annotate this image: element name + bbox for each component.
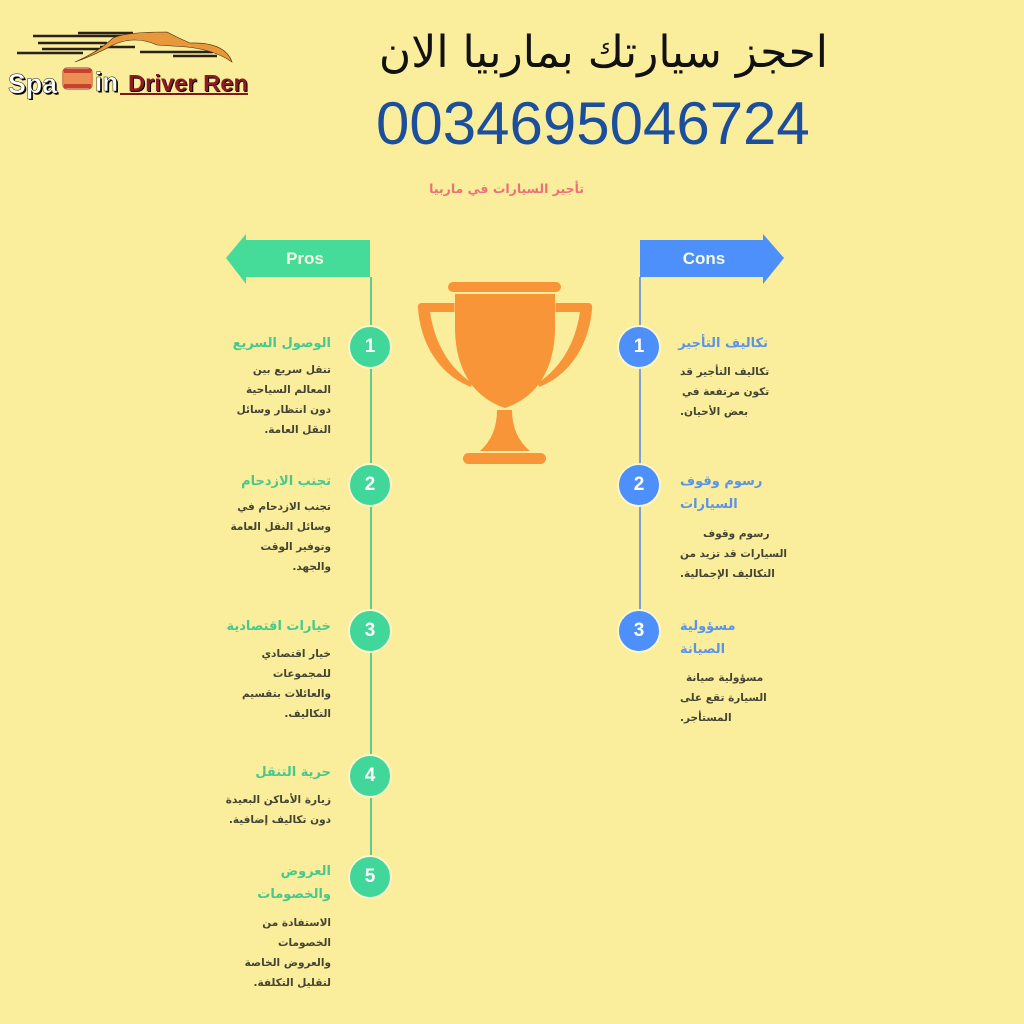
cons item 2: [680, 474, 787, 580]
logo wordmark: Spa: [8, 68, 57, 99]
pros item 1: [233, 336, 331, 436]
timeline line: cons: [639, 277, 640, 631]
subtitle: تأجير السيارات في ماربيا: [429, 181, 584, 196]
number badge 3: 3: [365, 620, 375, 641]
description: [226, 793, 331, 826]
heading: مسؤولية: [680, 619, 736, 634]
heading: تجنب الازدحام: [241, 474, 331, 489]
description: والعروض الخاصة: [245, 957, 331, 969]
description: وسائل النقل العامة: [231, 521, 331, 533]
description: والجهد.: [292, 561, 331, 573]
banner: Pros arrow: Pros: [286, 249, 324, 268]
logo wordmark: Spa: [10, 70, 59, 100]
heading: العروض: [281, 864, 331, 879]
logo wordmark: [8, 67, 249, 100]
description: [242, 648, 331, 720]
description: التكاليف.: [284, 708, 331, 720]
heading: حرية التنقل: [255, 765, 331, 780]
number badge 3: [617, 609, 661, 653]
number badge 2: [617, 463, 661, 507]
logo wordmark: in: [96, 68, 120, 98]
pros item 3: [226, 619, 331, 720]
heading: تكاليف التأجير: [678, 336, 768, 351]
heading: والخصومات: [257, 887, 331, 902]
description: المعالم السياحية: [246, 384, 331, 396]
description: الخصومات: [278, 937, 331, 949]
timeline line: pros: [370, 277, 372, 877]
number badge 1: 1: [634, 336, 644, 357]
banner: Cons arrow: Cons: [683, 249, 725, 268]
heading: رسوم وقوف: [680, 474, 762, 489]
description: دون تكاليف إضافية.: [229, 814, 331, 826]
heading: [257, 864, 331, 902]
description: [245, 917, 331, 989]
logo wordmark: in: [95, 67, 118, 97]
title: book your car in Marbella: احجز سيارتك بماربيا الان: [379, 27, 828, 78]
description: [680, 364, 769, 418]
logo: Spain Driver Rent: [8, 32, 249, 100]
number badge 3: [348, 609, 392, 653]
description: [237, 364, 331, 436]
cons item 1: [678, 334, 769, 418]
description: النقل العامة.: [264, 424, 331, 436]
number badge 2: 2: [634, 474, 644, 495]
description: تكاليف التأجير قد: [680, 366, 769, 378]
description: تجنب الازدحام في: [237, 501, 331, 513]
description: السيارة تقع على: [680, 692, 767, 704]
number badge 5: 5: [365, 866, 375, 887]
description: وتوفير الوقت: [260, 541, 331, 553]
description: خيار اقتصادي: [261, 648, 331, 660]
heading: الصيانة: [680, 642, 725, 657]
description: [231, 501, 331, 573]
banner: Cons arrow: [640, 234, 784, 284]
pros item 2: [231, 474, 331, 573]
description: بعض الأحيان.: [680, 406, 748, 418]
description: المستأجر.: [680, 712, 732, 724]
description: لتقليل التكلفة.: [253, 977, 331, 989]
description: [680, 528, 787, 580]
banner: Pros arrow: [226, 234, 370, 284]
icon: orange trophy: [418, 282, 592, 464]
description: رسوم وقوف: [703, 528, 770, 540]
description: دون انتظار وسائل: [237, 404, 331, 416]
logo wordmark: Driver Ren: [129, 71, 249, 97]
icon: Spanish flag badge: [63, 68, 92, 89]
description: للمجموعات: [273, 668, 331, 680]
number badge 5: [348, 855, 392, 899]
heading: الوصول السريع: [233, 336, 331, 351]
number badge 2: [348, 463, 392, 507]
heading: السيارات: [680, 497, 738, 512]
description: زيارة الأماكن البعيدة: [226, 794, 331, 806]
description: الاستفادة من: [262, 917, 331, 929]
heading: خيارات اقتصادية: [226, 619, 331, 634]
number badge 1: [617, 325, 661, 369]
description: [680, 672, 767, 724]
number badge 2: 2: [365, 474, 375, 495]
description: السيارات قد تزيد من: [680, 548, 787, 560]
logo wordmark: Driver Ren: [128, 70, 248, 96]
heading: [680, 474, 762, 512]
heading: [680, 619, 736, 657]
description: التكاليف الإجمالية.: [680, 568, 775, 580]
number badge 1: 1: [365, 336, 375, 357]
description: مسؤولية صيانة: [686, 672, 763, 684]
phone number: 0034695046724: [376, 90, 810, 157]
icon: speeding car silhouette: [17, 32, 232, 62]
description: تكون مرتفعة في: [682, 386, 769, 398]
pros item 5: [245, 864, 331, 989]
description: والعائلات بتقسيم: [242, 688, 331, 700]
number badge 3: 3: [634, 620, 644, 641]
cons item 3: [680, 619, 767, 724]
number badge 1: [348, 325, 392, 369]
pros item 4: [226, 765, 331, 826]
number badge 4: 4: [365, 765, 375, 786]
number badge 4: [348, 754, 392, 798]
description: تنقل سريع بين: [253, 364, 331, 376]
